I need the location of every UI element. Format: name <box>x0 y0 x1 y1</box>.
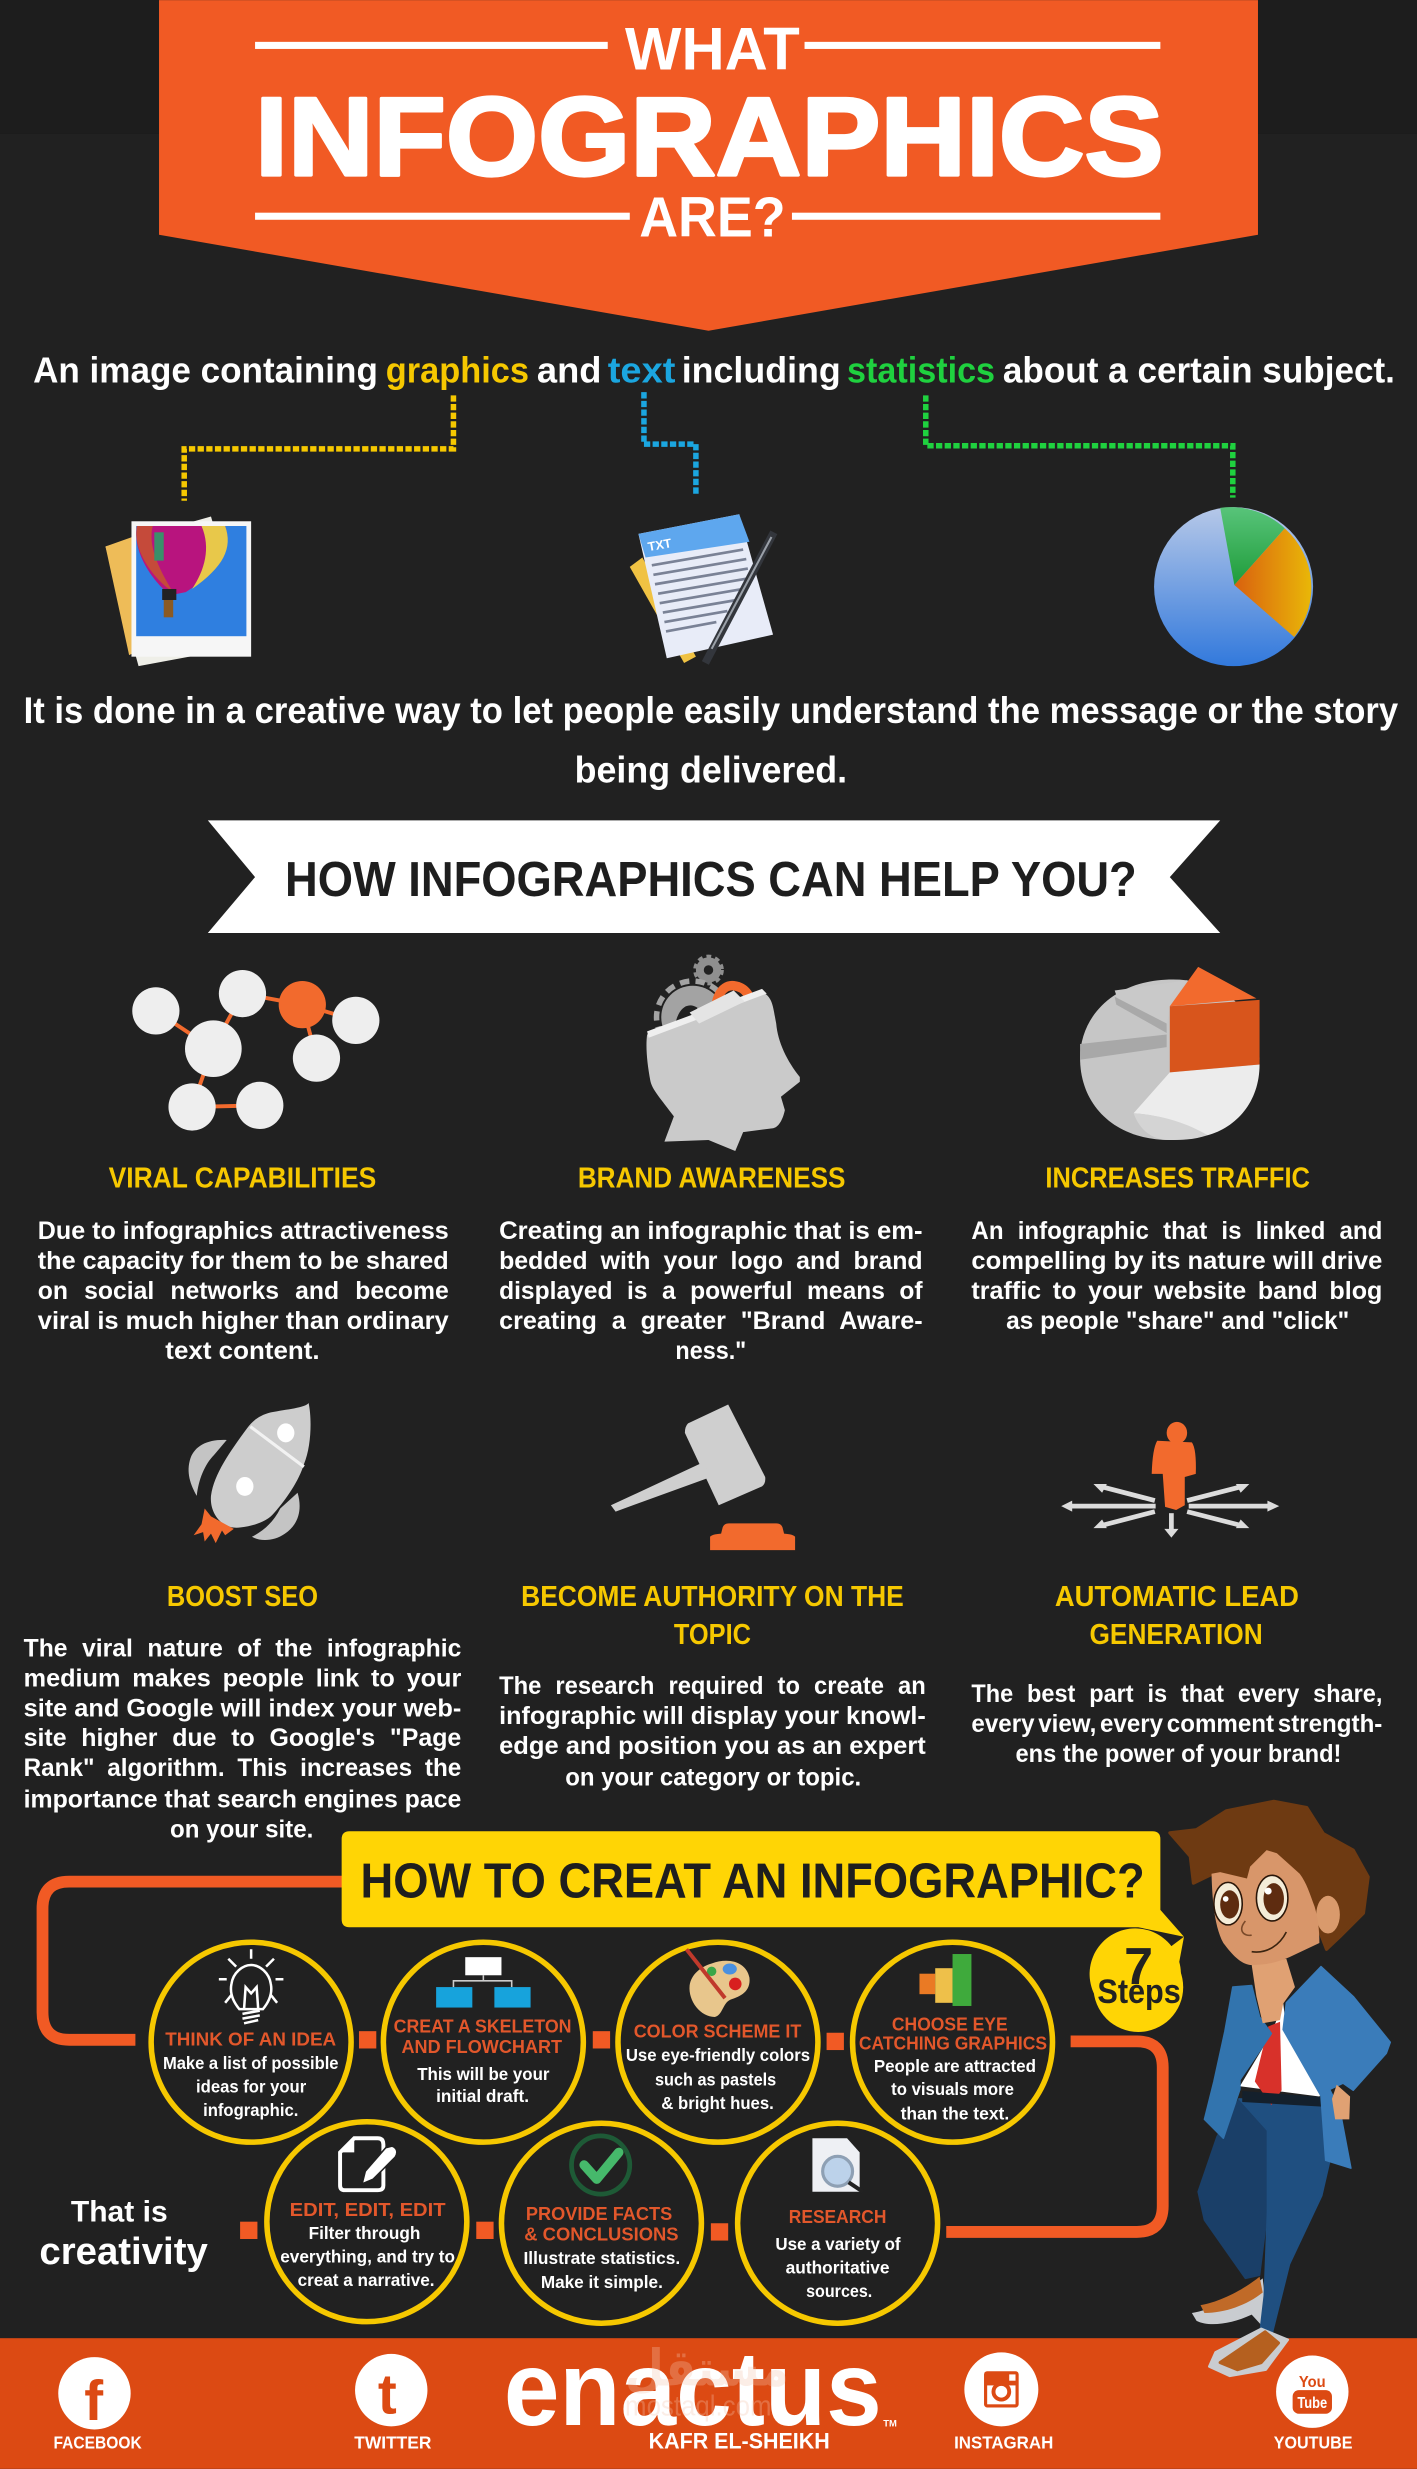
ear <box>1316 1896 1340 1934</box>
card: increases traffic: compelling by its nature will drive <box>971 1247 1382 1275</box>
footer bar <box>0 2331 1417 2469</box>
icon: flowchart <box>436 1957 531 2008</box>
belt <box>1242 2091 1324 2107</box>
enactus logo: KAFR EL-SHEIKH <box>649 2428 830 2453</box>
icon: pie chart <box>1154 507 1313 666</box>
right leg <box>1239 2099 1334 2337</box>
icon: head with gears <box>646 957 800 1151</box>
icon: photo with balloon <box>105 517 251 666</box>
card: viral capabilities: on social networks and become <box>38 1277 449 1305</box>
step: color scheme it: Use eye-friendly colors <box>626 2045 810 2065</box>
step: research: RESEARCH <box>789 2207 886 2227</box>
card: become authority: on your category or topic. <box>565 1764 861 1792</box>
definition sentence: graphics <box>386 350 529 391</box>
definition sentence: and <box>537 350 601 391</box>
icon: bar chart <box>919 1954 971 2006</box>
step: provide facts and conclusions: & CONCLUSIONS <box>524 2225 679 2245</box>
card: become authority: infographic will display your knowl- <box>499 1702 926 1730</box>
definition sentence: about a certain subject. <box>1003 350 1395 391</box>
step: provide facts and conclusions <box>501 2123 701 2323</box>
watermark: mostaql.com <box>625 2390 771 2422</box>
card: viral capabilities: viral is much higher than ordinary <box>38 1307 449 1335</box>
definition sentence <box>33 350 1395 391</box>
card: viral capabilities: VIRAL CAPABILITIES <box>109 1162 376 1194</box>
connector: text to document icon <box>644 392 696 495</box>
icon: document with magnifier <box>812 2138 863 2192</box>
card: boost SEO: BOOST SEO <box>167 1581 318 1613</box>
definition sentence: statistics <box>847 350 995 391</box>
eyes <box>1214 1882 1242 1925</box>
instagram icon and label: INSTAGRAH <box>954 2432 1053 2452</box>
connector: statistics to pie icon <box>926 395 1233 498</box>
card: increases traffic: as people "share" and "click" <box>1006 1307 1349 1335</box>
facebook icon and label <box>54 2357 142 2452</box>
character: thinking man <box>1170 1801 1390 2376</box>
card: become authority: TOPIC <box>674 1619 751 1651</box>
step: research <box>738 2123 938 2323</box>
icon: text document and pen <box>630 514 774 663</box>
step: think of an idea <box>151 1942 351 2142</box>
icon: 3D pie with orange slice <box>1080 967 1260 1140</box>
card: viral capabilities: Due to infographics attractiveness <box>38 1217 449 1245</box>
youtube icon and label: You <box>1299 2374 1326 2391</box>
twitter icon and label: t <box>378 2364 397 2427</box>
facebook icon and label: FACEBOOK <box>54 2432 142 2452</box>
step: think of an idea: infographic. <box>203 2100 298 2120</box>
card: boost SEO: importance that search engines pace <box>24 1786 461 1814</box>
card: increases traffic: An infographic that is linked and <box>971 1217 1382 1245</box>
heading box: how to creat an infographic <box>342 1831 1184 1937</box>
step: color scheme it: COLOR SCHEME IT <box>634 2021 801 2041</box>
card: automatic lead generation: every view, every comment strength- <box>971 1710 1382 1738</box>
heading box: how to creat an infographic: HOW TO CREAT AN INFOGRAPHIC? <box>361 1854 1145 1908</box>
step: edit, edit, edit: creat a narrative. <box>298 2270 435 2290</box>
card: become authority <box>499 1581 926 1792</box>
card: boost SEO: site and Google will index your web- <box>24 1694 461 1722</box>
step: creat a skeleton and flowchart: CREAT A SKELETON <box>394 2017 572 2037</box>
card: brand awareness <box>499 1162 923 1365</box>
step: choose eye catching graphics: CATCHING GRAPHICS <box>859 2033 1047 2053</box>
title banner <box>159 0 1258 331</box>
badge: 7 steps <box>1090 1928 1184 2032</box>
card: become authority: The research required to create an <box>499 1672 926 1700</box>
card: become authority: BECOME AUTHORITY ON THE <box>521 1581 904 1613</box>
card: increases traffic: traffic to your website band blog <box>971 1277 1382 1305</box>
card: brand awareness: ness." <box>675 1337 746 1365</box>
hair <box>1170 1801 1368 1949</box>
definition sentence: including <box>682 350 841 391</box>
badge: 7 steps: Steps <box>1097 1973 1181 2011</box>
card: boost SEO: The viral nature of the infographic <box>24 1634 461 1662</box>
definition sentence: An image containing <box>33 350 378 391</box>
card: automatic lead generation: The best part is that every share, <box>971 1680 1382 1708</box>
step: research: Use a variety of <box>775 2234 901 2254</box>
icon: paint palette <box>686 1949 750 2017</box>
step: choose eye catching graphics: to visuals more <box>891 2079 1014 2099</box>
explanation sentence <box>24 690 1399 791</box>
icon: text document and pen: TXT <box>647 536 673 554</box>
card: automatic lead generation: GENERATION <box>1090 1619 1263 1651</box>
instagram icon and label <box>954 2352 1053 2452</box>
definition sentence: text <box>608 350 675 391</box>
title banner: INFOGRAPHICS <box>255 74 1164 199</box>
shirt <box>1240 2003 1323 2097</box>
nose <box>1242 1921 1252 1935</box>
youtube icon and label: Tube <box>1297 2395 1327 2412</box>
card: brand awareness: displayed is a powerful means of <box>499 1277 923 1305</box>
step: choose eye catching graphics: than the text. <box>901 2103 1009 2123</box>
card: boost SEO: Rank" algorithm. This increases the <box>24 1754 461 1782</box>
step: provide facts and conclusions: Make it simple. <box>541 2272 663 2292</box>
step: research: authoritative <box>786 2258 890 2278</box>
connector: graphics to photo icon <box>184 395 453 501</box>
left shoe with shadow <box>1192 2278 1269 2333</box>
step: think of an idea: ideas for your <box>196 2077 306 2097</box>
step: edit, edit, edit: Filter through <box>309 2223 420 2243</box>
card: brand awareness: creating a greater "Brand Aware- <box>499 1307 923 1335</box>
hand and forearm on chin <box>1252 1959 1295 2023</box>
card: boost SEO <box>24 1581 461 1844</box>
facebook icon and label: f <box>84 2370 103 2433</box>
card: boost SEO: site higher due to Google's "Page <box>24 1724 461 1752</box>
step: creat a skeleton and flowchart: This will be your <box>417 2064 550 2084</box>
closing text: that is creativity: creativity <box>39 2231 208 2273</box>
youtube icon and label: YOUTUBE <box>1274 2432 1352 2452</box>
flow connector squares <box>240 2031 844 2241</box>
face <box>1212 1850 1319 1965</box>
step: edit, edit, edit: everything, and try to <box>280 2247 455 2267</box>
closing text: that is creativity <box>39 2196 208 2273</box>
icon: light bulb <box>219 1949 283 2023</box>
step: color scheme it: such as pastels <box>655 2069 776 2089</box>
twitter icon and label <box>354 2354 432 2452</box>
ribbon heading <box>208 820 1220 933</box>
step: research: sources. <box>806 2281 872 2301</box>
title banner: ARE? <box>639 186 786 249</box>
enactus logo: enactus <box>504 2331 882 2448</box>
youtube icon and label <box>1274 2356 1352 2452</box>
step: choose eye catching graphics: CHOOSE EYE <box>892 2014 1008 2034</box>
tie <box>1255 2022 1282 2105</box>
ribbon heading: HOW INFOGRAPHICS CAN HELP YOU? <box>285 853 1137 907</box>
step: provide facts and conclusions: Illustrate statistics. <box>524 2248 680 2268</box>
step: creat a skeleton and flowchart: AND FLOWCHART <box>401 2037 562 2057</box>
step: color scheme it <box>618 1942 818 2142</box>
icon: rocket <box>189 1403 311 1543</box>
card: increases traffic <box>971 1162 1382 1335</box>
card: increases traffic: INCREASES TRAFFIC <box>1045 1162 1310 1194</box>
title banner: WHAT <box>625 15 800 82</box>
icon: person with arrows <box>1061 1422 1279 1538</box>
twitter icon and label: TWITTER <box>354 2432 432 2452</box>
closing text: that is creativity: That is <box>71 2196 168 2229</box>
left leg <box>1198 2099 1267 2278</box>
watermark: مستقل <box>625 2338 789 2397</box>
right shoe <box>1209 2329 1288 2376</box>
card: brand awareness: BRAND AWARENESS <box>578 1162 845 1194</box>
card: boost SEO: on your site. <box>170 1816 313 1844</box>
icon: viral network <box>132 970 379 1131</box>
card: viral capabilities <box>38 1162 449 1365</box>
icon: gavel <box>611 1405 795 1550</box>
enactus logo: TM <box>883 2418 897 2429</box>
card: brand awareness: Creating an infographic that is em- <box>499 1217 923 1245</box>
card: automatic lead generation: AUTOMATIC LEAD <box>1055 1581 1299 1613</box>
step: think of an idea: THINK OF AN IDEA <box>165 2029 336 2049</box>
step: choose eye catching graphics: People are attracted <box>874 2056 1036 2076</box>
jacket left side <box>1204 1986 1271 2138</box>
card: become authority: edge and position you as an expert <box>499 1732 926 1760</box>
step: color scheme it: & bright hues. <box>661 2093 774 2113</box>
icon: document and pencil <box>340 2138 397 2190</box>
step: edit, edit, edit <box>267 2122 467 2322</box>
flow line: orange connector right <box>946 2041 1163 2232</box>
mouth <box>1252 1932 1286 1952</box>
step: creat a skeleton and flowchart: initial draft. <box>436 2086 529 2106</box>
step: provide facts and conclusions: PROVIDE FACTS <box>526 2204 672 2224</box>
flow line: orange connector left <box>43 1882 343 2040</box>
badge: 7 steps: 7 <box>1124 1938 1153 1996</box>
jacket right side <box>1283 1967 1390 2168</box>
card: viral capabilities: text content. <box>165 1337 320 1365</box>
card: viral capabilities: the capacity for them to be shared <box>38 1247 449 1275</box>
step: choose eye catching graphics <box>853 1942 1053 2142</box>
card: automatic lead generation <box>971 1581 1382 1768</box>
watermark <box>625 2338 789 2422</box>
card: brand awareness: bedded with your logo and brand <box>499 1247 923 1275</box>
step: edit, edit, edit: EDIT, EDIT, EDIT <box>290 2200 446 2220</box>
hand on hip <box>1332 2085 1350 2119</box>
card: boost SEO: medium makes people link to your <box>24 1664 461 1692</box>
step: creat a skeleton and flowchart <box>383 1942 583 2142</box>
step: think of an idea: Make a list of possible <box>163 2053 339 2073</box>
card: automatic lead generation: ens the power of your brand! <box>1016 1740 1341 1768</box>
explanation sentence: being delivered. <box>575 750 847 791</box>
icon: check mark <box>572 2136 630 2194</box>
